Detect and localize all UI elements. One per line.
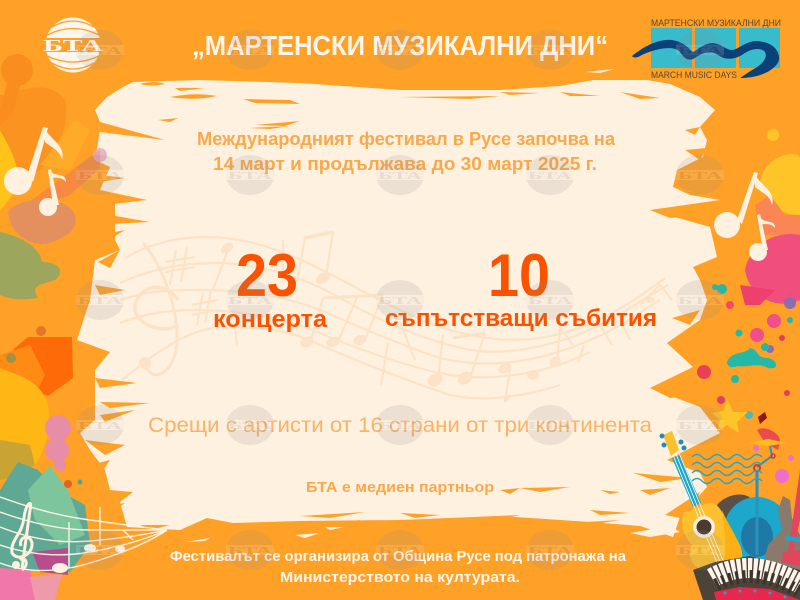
- intro text: Международният фестивал в Русе започва на: [197, 129, 616, 149]
- March Music Days logo: МАРТЕНСКИ МУЗИКАЛНИ ДНИ: [651, 18, 781, 29]
- artists text: Срещи с артисти от 16 страни от три континента: [148, 414, 652, 437]
- title: „МАРТЕНСКИ МУЗИКАЛНИ ДНИ“: [192, 30, 608, 61]
- stat: 23 concerts: [213, 242, 328, 333]
- media partner: БТА е медиен партньор: [306, 479, 494, 496]
- left paint splashes: [0, 54, 107, 600]
- stat: 23 concerts: 23: [236, 242, 298, 309]
- left white staff with treble clef: [0, 497, 167, 570]
- right music notes: [714, 172, 775, 261]
- intro text: 14 март и продължава до 30 март 2025 г.: [213, 154, 597, 174]
- stat: 10 events: 10: [488, 242, 550, 309]
- March Music Days logo: [632, 18, 781, 81]
- instruments illustration: [660, 431, 800, 600]
- stat: 10 events: съпътстващи събития: [385, 305, 657, 332]
- footer text: Министерството на културата.: [280, 570, 520, 586]
- stat: 23 concerts: концерта: [213, 306, 328, 333]
- watermark grid: [76, 30, 724, 570]
- background music notes: [139, 240, 655, 389]
- BTA logo: [42, 18, 105, 72]
- right paint splashes: [697, 129, 800, 483]
- footer text: [170, 549, 627, 586]
- March Music Days logo: MARCH MUSIC DAYS: [651, 70, 737, 81]
- BTA logo: БТА: [43, 36, 104, 55]
- left music notes: [4, 127, 66, 216]
- background music staff: [120, 232, 672, 402]
- cream brush panel: [77, 69, 720, 542]
- stat: 10 events: [385, 242, 657, 332]
- footer text: Фестивалът се организира от Община Русе под патронажа на: [170, 549, 627, 565]
- intro text: [197, 129, 616, 174]
- left staff notes: [12, 544, 125, 573]
